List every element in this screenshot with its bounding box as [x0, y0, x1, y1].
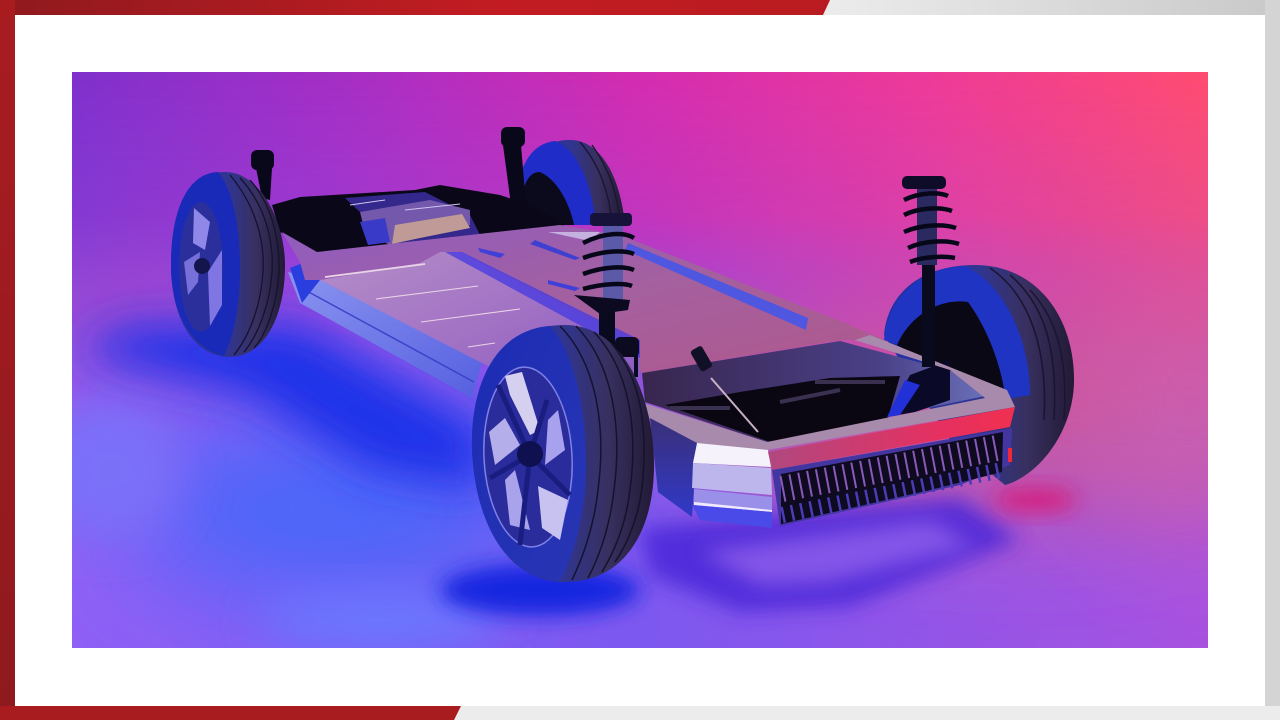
wheel rim [479, 365, 577, 549]
lower bumper body [772, 428, 1012, 526]
rear engine bay [272, 185, 565, 253]
chassis front corner [290, 262, 320, 303]
battery side skirt [288, 272, 482, 398]
front left wheel [472, 325, 654, 582]
deck blue strip [625, 243, 808, 330]
panel: illustration photo [72, 72, 1208, 648]
main deck [282, 225, 885, 373]
front left strut [574, 213, 639, 377]
silver corner light [692, 443, 772, 528]
tray seam lines [325, 264, 520, 347]
tyre grooves [560, 326, 644, 580]
red bumper band [768, 407, 1015, 470]
tyre sidewall [472, 326, 586, 581]
front grille [781, 432, 1003, 524]
rear right wheel [515, 140, 625, 225]
red marker [1008, 448, 1012, 462]
rear right strut [501, 127, 526, 205]
front right strut [902, 176, 959, 367]
front right wheel [884, 265, 1074, 485]
compartment rim [643, 335, 1015, 450]
left side panel [650, 418, 697, 517]
rear left wheel [171, 172, 285, 357]
battery tray [320, 252, 640, 379]
rear left rim [179, 202, 223, 332]
studio backdrop gradient [72, 72, 1208, 648]
rear left strut [251, 150, 274, 200]
tyre tread [472, 325, 654, 582]
floor shadows [75, 325, 1077, 616]
front compartment [642, 341, 985, 442]
deck details [478, 232, 600, 291]
